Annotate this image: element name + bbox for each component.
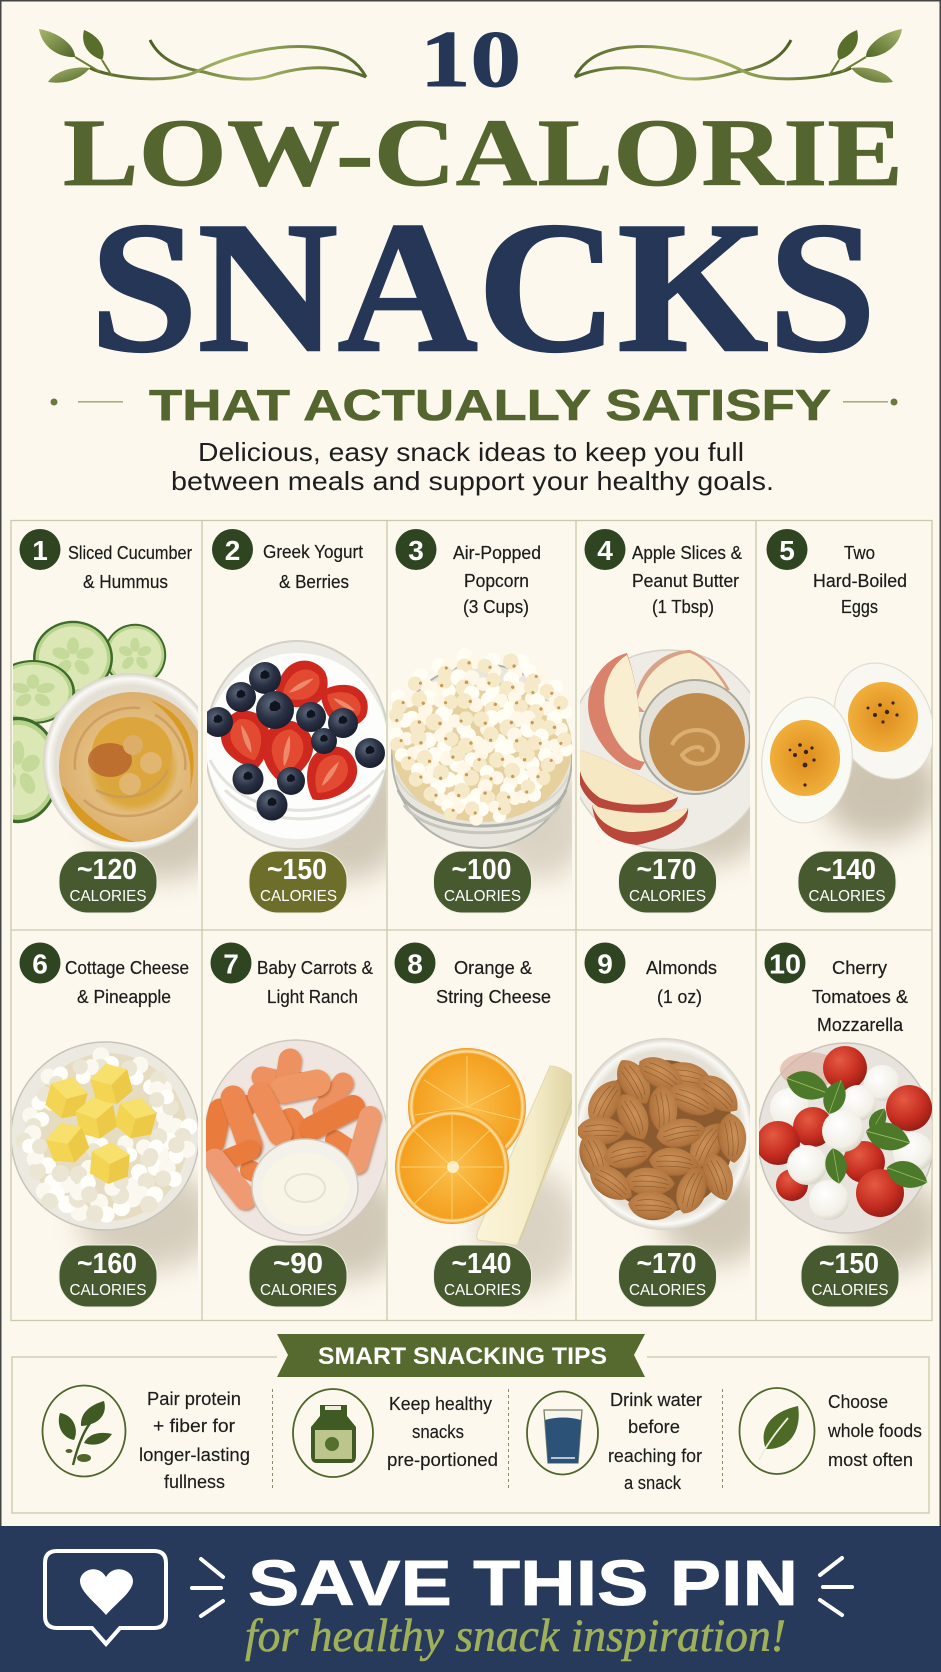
calorie pill: CALORIES <box>260 1282 337 1299</box>
tip text: Choose <box>828 1392 888 1412</box>
snack name: Mozzarella <box>817 1015 904 1035</box>
tip text <box>387 1394 498 1470</box>
number badge: 7 <box>223 948 239 980</box>
snack name: Almonds <box>646 958 717 978</box>
ornament: right dash <box>843 398 898 406</box>
panel: air-popped popcorn <box>389 529 572 914</box>
calorie pill <box>618 851 716 913</box>
panel: cherry tomatoes and mozzarella <box>756 942 941 1307</box>
snack name <box>632 543 742 617</box>
panel: orange and string cheese <box>394 942 580 1307</box>
calorie pill: ~120 <box>77 854 137 886</box>
intro text <box>171 437 774 496</box>
calorie pill: ~150 <box>819 1248 879 1280</box>
panel: almonds <box>578 942 750 1308</box>
food photo: apples <box>580 649 750 878</box>
footer banner <box>0 1526 941 1672</box>
calorie pill <box>59 1245 157 1307</box>
title: 10: 10 <box>420 14 521 104</box>
calorie pill: ~150 <box>267 854 327 886</box>
calorie pill: CALORIES <box>444 888 521 905</box>
tip text: most often <box>828 1450 913 1470</box>
snack name <box>646 958 717 1007</box>
subtitle heading: THAT ACTUALLY SATISFY <box>149 381 831 430</box>
call to action: SAVE THIS PIN <box>248 1547 798 1619</box>
snack name: Sliced Cucumber <box>68 543 192 563</box>
snack name: Eggs <box>841 597 878 617</box>
number badge <box>584 529 626 570</box>
calorie pill: CALORIES <box>808 888 886 905</box>
script tagline: for healthy snack inspiration! <box>245 1610 786 1662</box>
tip text: a snack <box>624 1473 682 1493</box>
tip text: fullness <box>164 1472 225 1492</box>
number badge <box>766 529 808 570</box>
snack name <box>436 958 551 1007</box>
tip text: Drink water <box>610 1390 702 1410</box>
snack name: Orange & <box>454 958 532 978</box>
calorie pill: CALORIES <box>70 1282 146 1299</box>
snack name: Two <box>844 543 875 563</box>
title: snacks: SNACKS <box>90 184 876 391</box>
panel: cottage cheese and pineapple <box>12 942 198 1308</box>
calorie pill <box>801 1245 899 1307</box>
calorie pill: CALORIES <box>444 1282 521 1299</box>
snack name: (3 Cups) <box>463 597 529 617</box>
snack name: Baby Carrots & <box>257 958 373 978</box>
snack name <box>257 958 373 1007</box>
snack name: Cottage Cheese <box>65 958 189 978</box>
icon: snack jar <box>293 1389 373 1477</box>
calorie pill: ~170 <box>636 1248 696 1280</box>
tip text: Keep healthy <box>389 1394 492 1414</box>
calorie pill: CALORIES <box>70 888 146 905</box>
calorie pill: ~140 <box>452 1248 512 1280</box>
snack name <box>65 958 189 1007</box>
calorie pill <box>249 851 347 913</box>
tip text: pre-portioned <box>387 1450 498 1470</box>
number badge: 10 <box>769 948 801 980</box>
calorie pill <box>434 851 532 913</box>
panel: greek yogurt and berries <box>207 529 386 914</box>
calorie pill: ~90 <box>273 1248 323 1280</box>
calorie pill <box>434 1245 532 1307</box>
number badge: 2 <box>225 535 240 566</box>
food photo: caprese <box>756 1043 941 1270</box>
number badge <box>210 942 252 984</box>
snack name <box>453 543 541 617</box>
snack name: String Cheese <box>436 987 551 1007</box>
number badge: 9 <box>597 948 613 980</box>
tip text: whole foods <box>827 1421 922 1441</box>
snack name: Light Ranch <box>267 987 358 1007</box>
calorie pill: CALORIES <box>629 1282 706 1299</box>
snack name: Tomatoes & <box>812 987 908 1007</box>
snack name: (1 oz) <box>657 987 702 1007</box>
calorie pill <box>618 1245 716 1307</box>
panel: cucumber and hummus <box>13 529 198 914</box>
snack name: Air-Popped <box>453 543 541 563</box>
tip text: reaching for <box>608 1446 702 1466</box>
calorie pill: ~160 <box>77 1248 137 1280</box>
calorie pill: CALORIES <box>629 888 706 905</box>
number badge <box>396 529 436 570</box>
calorie pill: ~140 <box>816 854 876 886</box>
food photo: popcorn <box>389 654 572 890</box>
snack name: & Hummus <box>83 572 168 592</box>
ribbon heading: SMART SNACKING TIPS <box>318 1343 607 1370</box>
icon: leaf <box>740 1388 814 1474</box>
tip text: Pair protein <box>147 1389 241 1409</box>
number badge <box>394 942 436 984</box>
food photo: yogurt bowl <box>203 640 410 880</box>
calorie pill: CALORIES <box>812 1282 888 1299</box>
snack name <box>812 958 908 1035</box>
tip text: longer-lasting <box>139 1445 250 1465</box>
snack name: Apple Slices & <box>632 543 742 563</box>
burst rays left <box>192 1559 223 1616</box>
panel: baby carrots and ranch <box>206 942 386 1308</box>
number badge: 4 <box>597 535 613 566</box>
snack name: & Berries <box>279 572 349 592</box>
tip text <box>608 1390 702 1493</box>
number badge: 6 <box>32 948 48 980</box>
snack name <box>263 542 363 592</box>
number badge <box>20 942 60 984</box>
panel: hard-boiled eggs <box>756 529 941 913</box>
number badge <box>212 529 253 570</box>
calorie pill: ~170 <box>636 854 696 886</box>
ornament: left dash <box>50 398 123 406</box>
food photo: orange <box>395 1048 580 1290</box>
snack name: Cherry <box>832 958 887 978</box>
snack name: & Pineapple <box>77 987 171 1007</box>
icon: water glass <box>527 1392 598 1474</box>
number badge: 8 <box>407 948 423 980</box>
grid frame <box>11 520 932 1320</box>
food photo: eggs <box>756 647 941 840</box>
food photo: cottage cheese <box>11 1042 220 1270</box>
food photo: carrots <box>204 1040 405 1280</box>
ribbon heading <box>277 1334 645 1377</box>
icon: heart speech bubble <box>45 1551 166 1644</box>
calorie pill: ~100 <box>452 854 512 886</box>
snack name: (1 Tbsp) <box>652 597 714 617</box>
snack name: Popcorn <box>464 571 529 591</box>
number badge <box>764 942 806 984</box>
snack name <box>68 543 192 592</box>
title: low-calorie: LOW-CALORIE <box>63 99 903 206</box>
number badge: 5 <box>779 535 795 566</box>
ornament: right vine <box>575 29 902 83</box>
snack name: Greek Yogurt <box>263 542 363 562</box>
snack name: Peanut Butter <box>632 571 739 591</box>
snack name: Hard-Boiled <box>813 571 907 591</box>
icon: sprig <box>42 1386 126 1476</box>
tip text <box>139 1389 250 1492</box>
calorie pill: CALORIES <box>260 888 337 905</box>
panel: apple slices and peanut butter <box>580 529 750 914</box>
ornament: left vine <box>39 29 366 83</box>
number badge: 1 <box>32 535 48 566</box>
tip text: before <box>628 1417 680 1437</box>
intro text: Delicious, easy snack ideas to keep you full <box>198 437 744 467</box>
number badge <box>584 942 626 984</box>
snack name <box>813 543 907 617</box>
food photo: almonds <box>573 1038 770 1265</box>
food photo: hummus <box>13 620 198 892</box>
tip text: snacks <box>412 1422 464 1442</box>
burst rays right <box>820 1558 852 1615</box>
panel: smart snacking tips <box>12 1334 929 1513</box>
intro text: between meals and support your healthy goals. <box>171 466 774 496</box>
tip text: + fiber for <box>153 1416 235 1436</box>
tip text <box>827 1392 922 1470</box>
calorie pill <box>59 851 157 913</box>
calorie pill <box>249 1245 347 1307</box>
calorie pill <box>798 851 896 913</box>
number badge <box>20 529 60 570</box>
number badge: 3 <box>408 535 424 566</box>
